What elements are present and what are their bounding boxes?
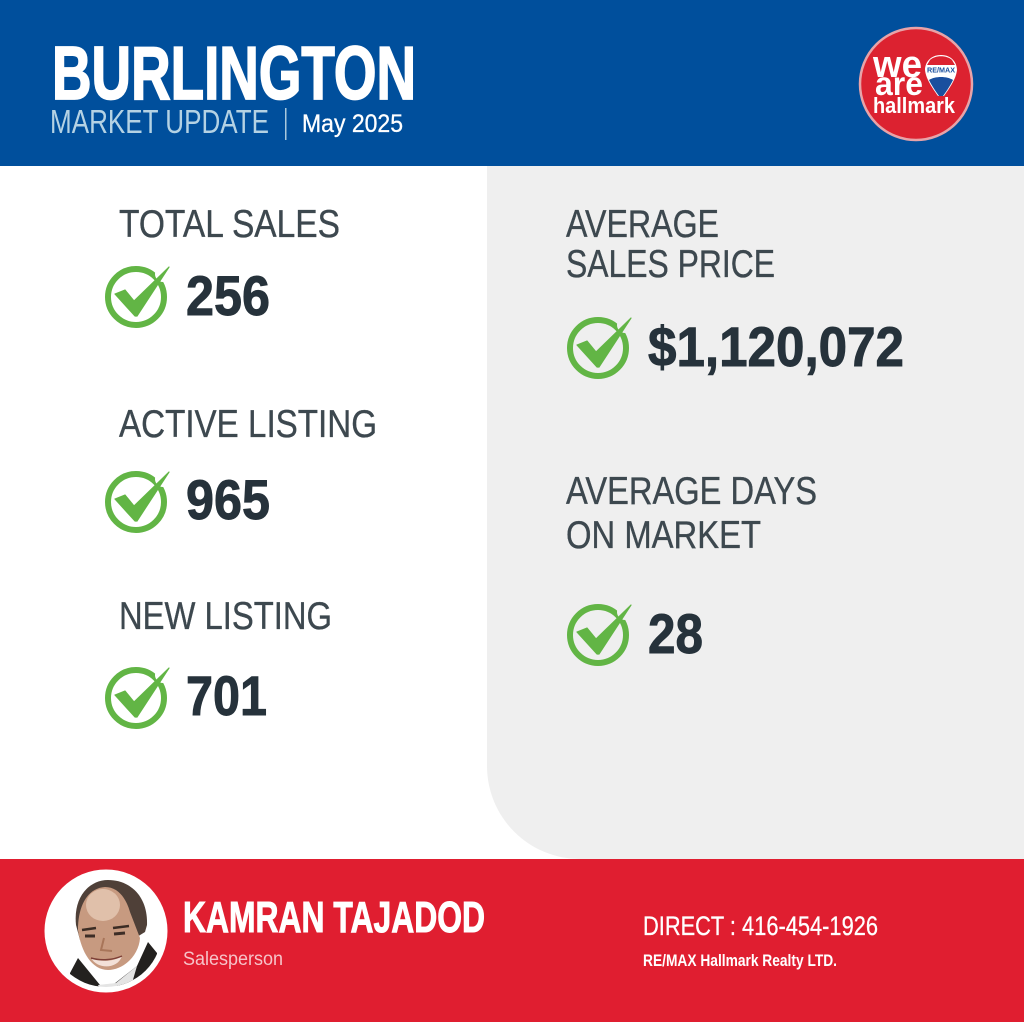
agent role: Salesperson — [183, 949, 283, 970]
value: total sales: 256 — [186, 264, 270, 327]
heading: active listing: ACTIVE LISTING — [119, 403, 377, 446]
icon: we are hallmark logo: are — [875, 65, 923, 102]
icon: check — [570, 604, 633, 663]
heading: average sales price: AVERAGE — [566, 203, 719, 246]
icon: we are hallmark logo — [860, 28, 972, 140]
icon: check — [570, 317, 633, 376]
subtitle: market update: MARKET UPDATE — [50, 103, 269, 140]
title: BURLINGTON — [52, 31, 416, 115]
footer band — [0, 859, 1024, 1022]
direct phone: DIRECT : 416-454-1926 — [643, 911, 878, 941]
value: active listing: 965 — [186, 468, 270, 531]
icon: check — [108, 667, 171, 726]
stat: new listing — [108, 595, 332, 727]
value: average sales price: $1,120,072 — [648, 315, 904, 378]
icon: we are hallmark logo: we — [872, 44, 922, 86]
header band — [0, 0, 1024, 166]
icon: we are hallmark logo: hallmark — [873, 93, 956, 118]
value: days on market: 28 — [648, 602, 703, 665]
heading: average sales price — [566, 203, 775, 286]
subtitle: date: May 2025 — [302, 110, 403, 138]
portrait — [44, 870, 168, 992]
agent name: KAMRAN TAJADOD — [183, 893, 485, 942]
heading: total sales: TOTAL SALES — [119, 203, 340, 246]
value: new listing: 701 — [186, 664, 267, 727]
brokerage: RE/MAX Hallmark Realty LTD. — [643, 951, 837, 970]
heading: average sales price: SALES PRICE — [566, 243, 775, 286]
stat: average sales price — [566, 203, 904, 378]
stat: average days on market — [566, 470, 817, 665]
heading: average days on market — [566, 470, 817, 557]
heading: average days on market: ON MARKET — [566, 514, 761, 557]
heading: new listing: NEW LISTING — [119, 595, 332, 638]
icon: check — [108, 266, 171, 325]
icon: we are hallmark logo: RE/MAX — [927, 66, 955, 74]
stat: active listing — [108, 403, 377, 531]
heading: average days on market: AVERAGE DAYS — [566, 470, 817, 513]
panel: right grey stats panel — [487, 166, 1024, 859]
icon: check — [108, 471, 171, 530]
stat: total sales — [108, 203, 340, 327]
